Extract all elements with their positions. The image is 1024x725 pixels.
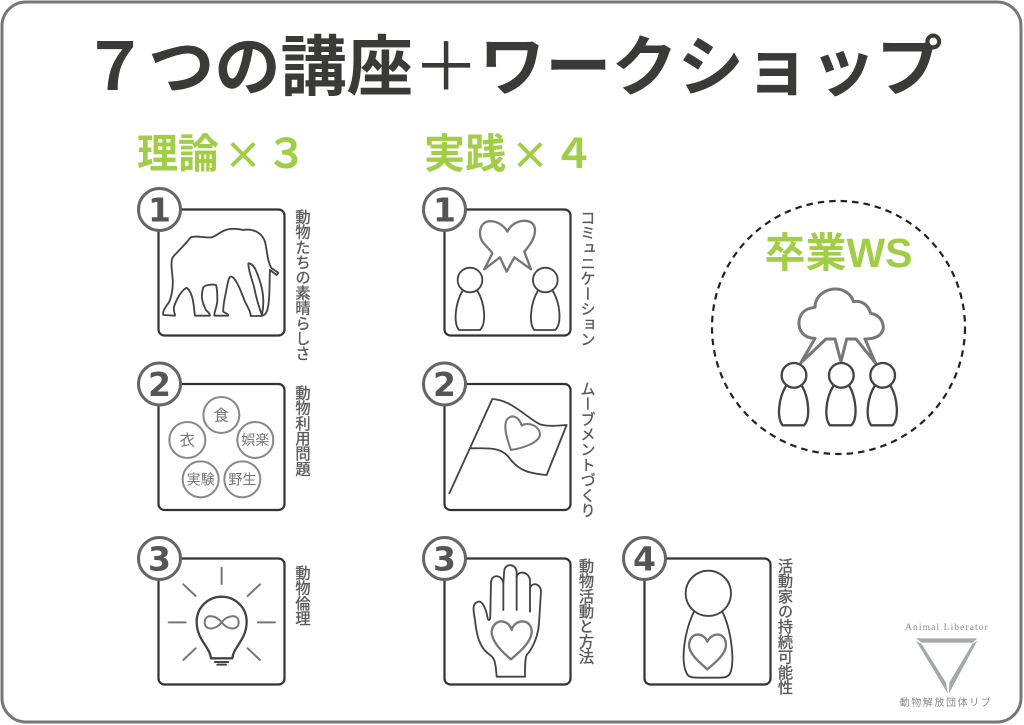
icon: five circles: 娯楽 <box>241 432 269 448</box>
number badge 3 <box>138 538 180 580</box>
panel: practice 3 <box>424 538 594 684</box>
number badge 3: 3 <box>148 540 171 578</box>
icon: cloud and three people <box>779 289 897 425</box>
icon: person with heart <box>684 571 732 678</box>
number badge 2 <box>424 363 466 405</box>
number badge 4: 4 <box>633 540 656 578</box>
heading: practice x4: 実践×４ <box>424 127 594 179</box>
label: 活動家の持続可能性 <box>776 558 793 695</box>
label: 動物活動と方法 <box>576 558 594 665</box>
label: コミュニケーション <box>578 210 595 347</box>
icon: hand with heart <box>474 565 541 677</box>
title: ７つの講座＋ワークショップ <box>82 31 942 105</box>
number badge 2: 2 <box>148 365 171 404</box>
panel: theory 3 <box>138 538 311 684</box>
icon: two people with heart bubble <box>456 221 559 330</box>
icon: five circles: 食 <box>214 408 229 425</box>
label: 動物利用問題 <box>293 385 311 477</box>
label: ムーブメントづくり <box>578 381 595 518</box>
logo: Animal Liberator: 動物解放団体リブ <box>900 696 992 709</box>
number badge 1: 1 <box>148 190 171 230</box>
number badge 2: 2 <box>433 365 456 404</box>
icon: elephant <box>163 229 278 316</box>
number badge 3 <box>424 538 466 580</box>
icon: flag with heart <box>449 399 567 493</box>
number badge 3: 3 <box>433 540 456 578</box>
heading: graduation WS: 卒業WS <box>764 230 913 276</box>
panel: graduation workshop <box>712 201 965 454</box>
icon: five circles: 野生 <box>228 471 256 487</box>
icon: five circles: 実験 <box>187 471 215 487</box>
number badge 1 <box>424 188 466 230</box>
label: 動物倫理 <box>293 565 311 626</box>
number badge 1 <box>138 188 180 230</box>
logo: Animal Liberator: Animal Liberator <box>905 623 989 633</box>
icon: light bulb <box>169 568 275 665</box>
number badge 2 <box>138 363 180 405</box>
panel: practice 1 <box>424 188 595 347</box>
label: 動物たちの素晴らしさ <box>293 209 311 361</box>
logo: Animal Liberator <box>900 623 992 709</box>
number badge 1: 1 <box>433 190 456 230</box>
heading: theory x3: 理論×３ <box>137 127 307 179</box>
panel: theory 2 <box>138 363 311 510</box>
number badge 4 <box>624 538 666 580</box>
panel: theory 1 <box>138 188 311 361</box>
icon: five circles: 衣 <box>180 433 195 450</box>
panel: practice 4 <box>624 538 793 695</box>
icon: five circles <box>169 397 273 497</box>
panel: practice 2 <box>424 363 595 518</box>
